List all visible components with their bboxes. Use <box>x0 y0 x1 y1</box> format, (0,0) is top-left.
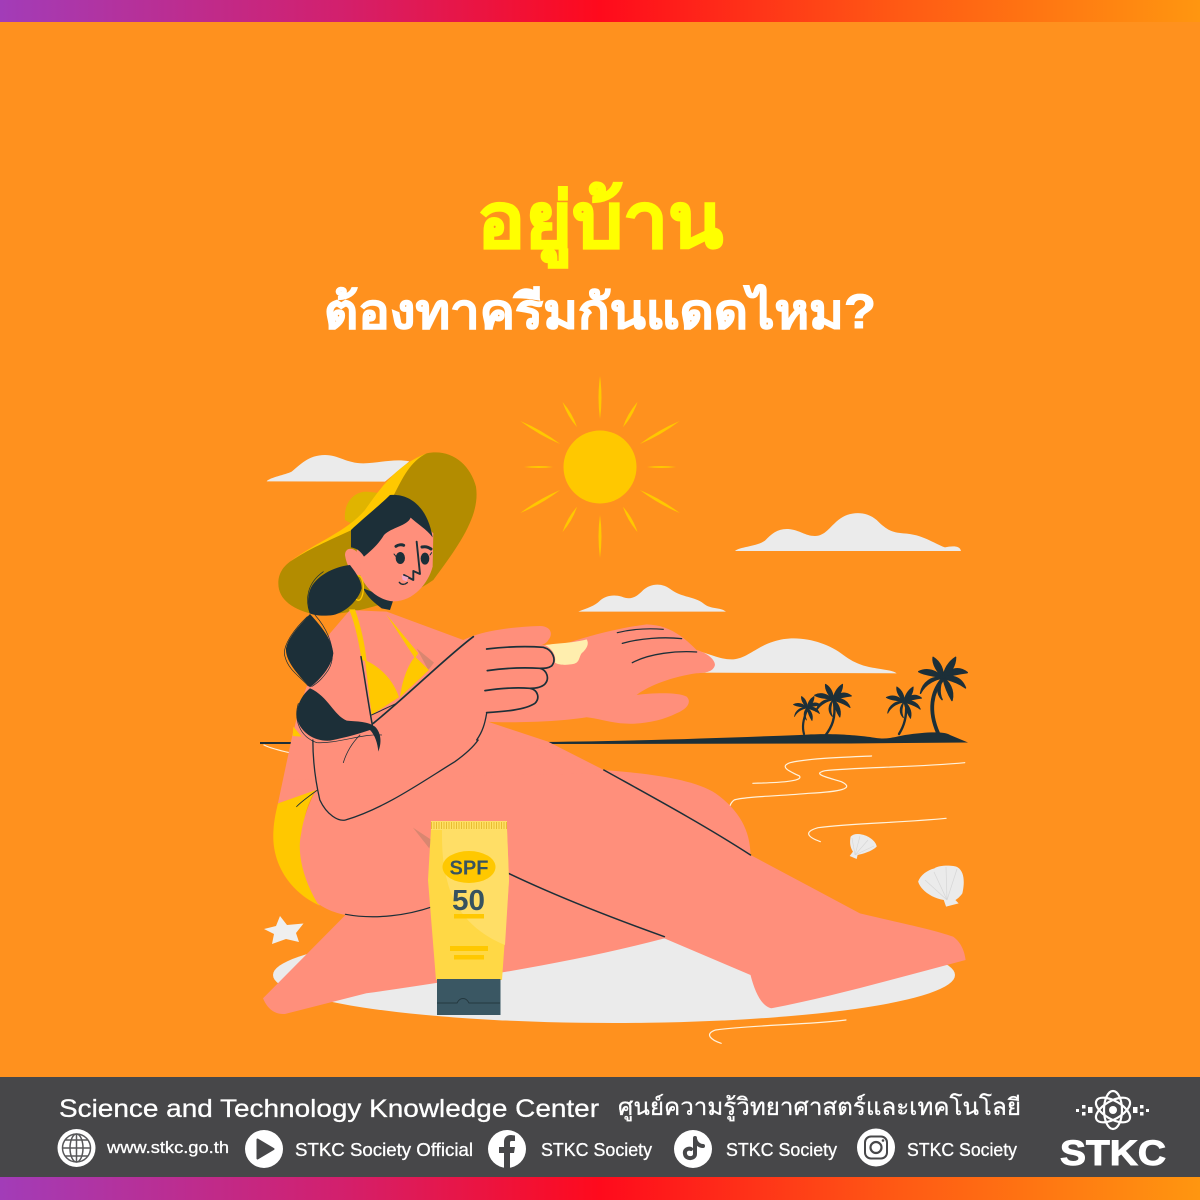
earring <box>353 576 363 600</box>
nose <box>404 542 420 580</box>
sunscreen tube: SPF <box>450 858 488 880</box>
braided ponytail <box>284 565 382 763</box>
body contour lines <box>297 740 751 937</box>
facebook label: STKC Society <box>541 1140 652 1160</box>
website label: www.stkc.go.th <box>106 1138 229 1157</box>
icon: video play <box>245 1130 283 1168</box>
clouds <box>267 455 961 673</box>
bikini bottom <box>273 789 320 906</box>
far arm and hand <box>477 624 715 724</box>
instagram label: STKC Society <box>907 1140 1017 1160</box>
icon: website globe <box>58 1129 96 1167</box>
top gradient bar <box>0 0 1200 22</box>
icon: sun <box>520 376 680 558</box>
video channel label: STKC Society Official <box>295 1140 473 1160</box>
50 label: 50 <box>452 885 485 917</box>
tube crimp <box>431 821 507 830</box>
far knee <box>604 770 751 857</box>
hair top <box>351 495 433 557</box>
bikini top <box>293 609 434 737</box>
mouth <box>402 575 408 581</box>
icon: instagram <box>857 1128 895 1166</box>
icon: small shell <box>850 834 877 859</box>
logo wordmark: STKC <box>1060 1134 1166 1173</box>
sun hat <box>278 452 477 615</box>
subtitle: ต้องทาครีมกันแดดไหม? <box>324 283 876 339</box>
tube cap <box>437 979 500 1015</box>
icon: tiktok <box>674 1130 712 1168</box>
island horizon with palms <box>260 657 968 744</box>
torso <box>283 610 605 780</box>
icon: starfish <box>264 916 304 944</box>
footer heading thai: ศูนย์ความรู้วิทยาศาสตร์และเทคโนโลยี <box>618 1093 1021 1122</box>
neck and face <box>345 495 433 610</box>
tube body <box>428 829 509 980</box>
hand lines on far hand <box>617 629 697 663</box>
footer panel <box>0 1077 1200 1177</box>
tiktok label: STKC Society <box>726 1140 837 1160</box>
sunscreen tube <box>428 821 509 1015</box>
white water lines <box>264 745 965 1043</box>
bottom gradient bar <box>0 1177 1200 1200</box>
footer heading english: Science and Technology Knowledge Center <box>59 1095 599 1123</box>
logo: STKC atom mark <box>1060 1091 1166 1173</box>
near arm and hand <box>313 626 554 780</box>
icon: large shell <box>918 866 964 907</box>
eyes and brows <box>396 552 405 564</box>
woman <box>263 452 966 1014</box>
sunscreen dab on hand <box>545 639 588 665</box>
beach mat <box>273 927 955 1023</box>
body and legs <box>263 720 966 1014</box>
title: อยู่บ้าน <box>477 179 723 268</box>
icon: facebook <box>488 1130 526 1168</box>
SPF label <box>442 851 496 883</box>
